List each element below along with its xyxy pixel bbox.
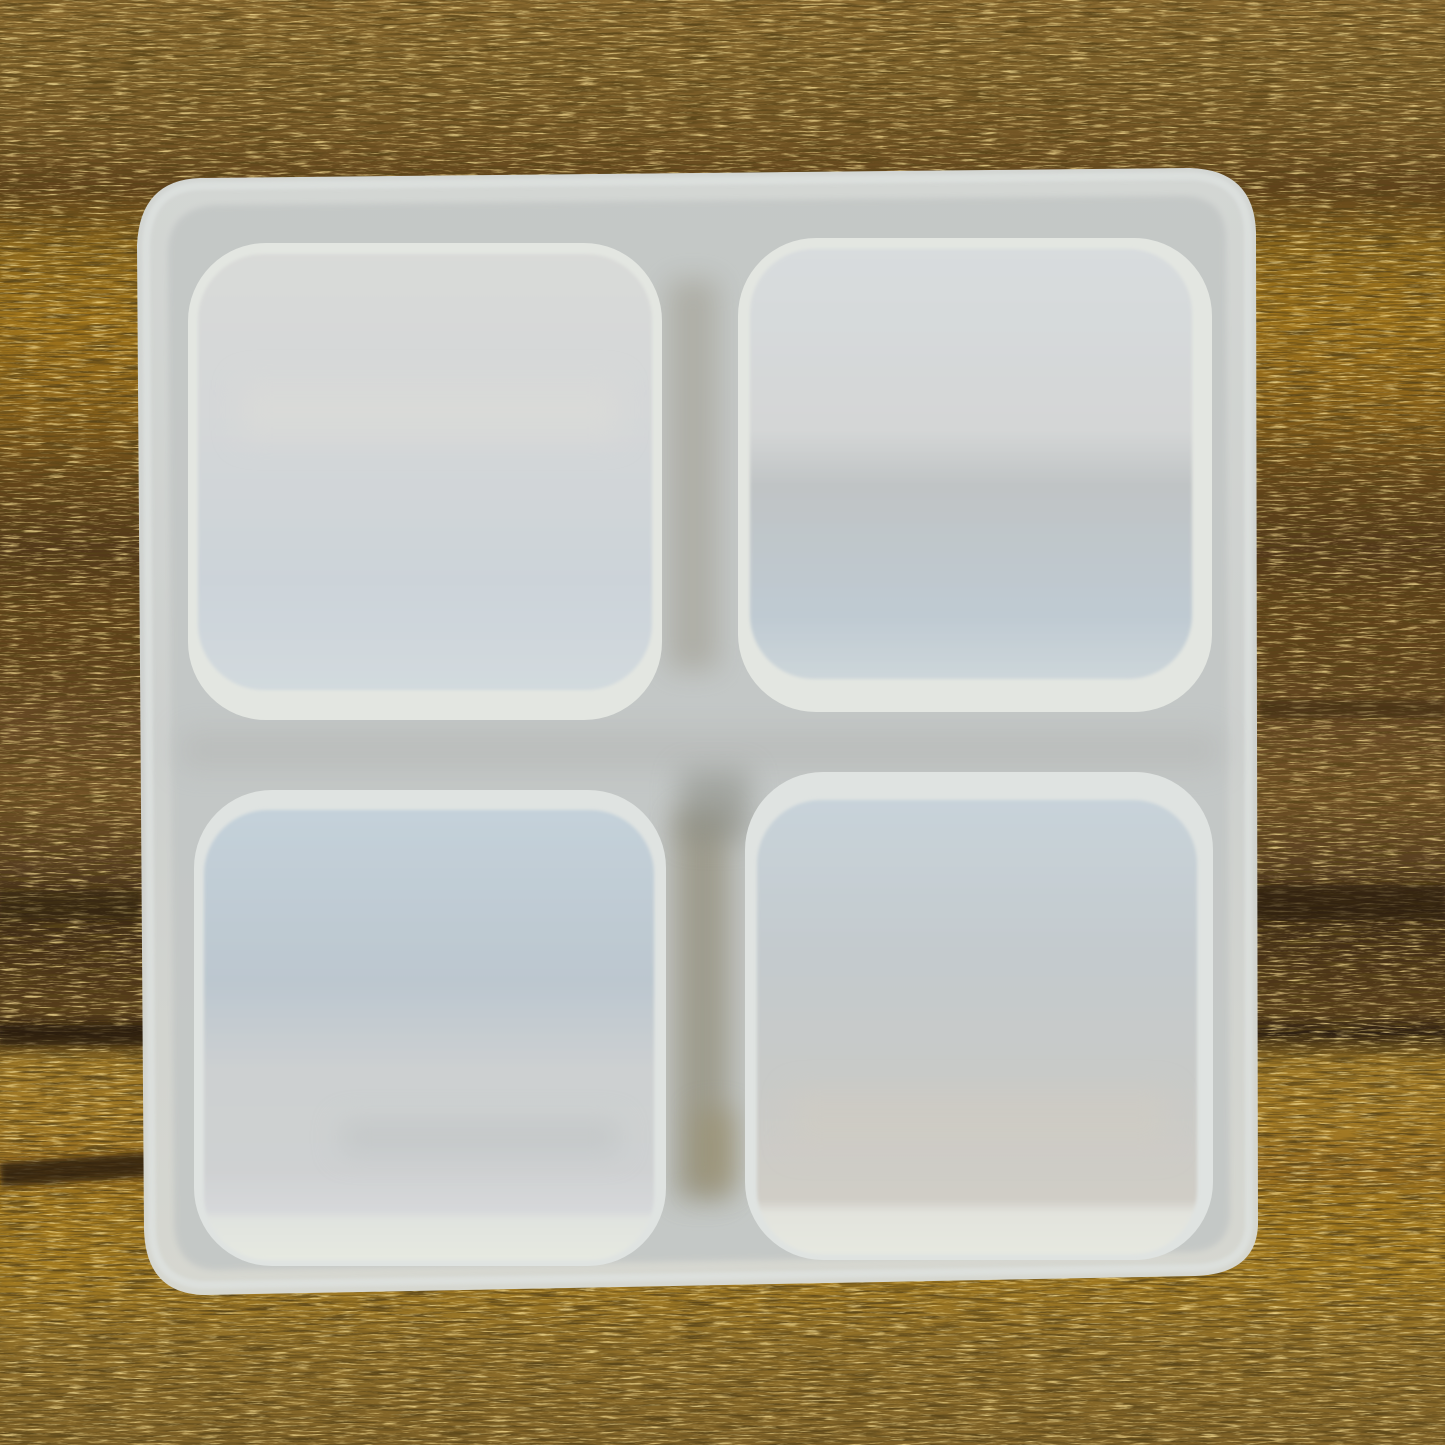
silicone mold tray	[137, 168, 1258, 1295]
tray shadow streaks between cavities	[180, 280, 1220, 1200]
tray inner floor	[168, 196, 1230, 1270]
cavity: top left	[188, 243, 662, 720]
cavity: top right	[738, 238, 1212, 712]
cavity: bottom left	[194, 790, 666, 1266]
tray outer body	[137, 168, 1258, 1295]
tray outer rim highlight	[146, 176, 1249, 1285]
cavity: bottom right	[745, 772, 1213, 1260]
